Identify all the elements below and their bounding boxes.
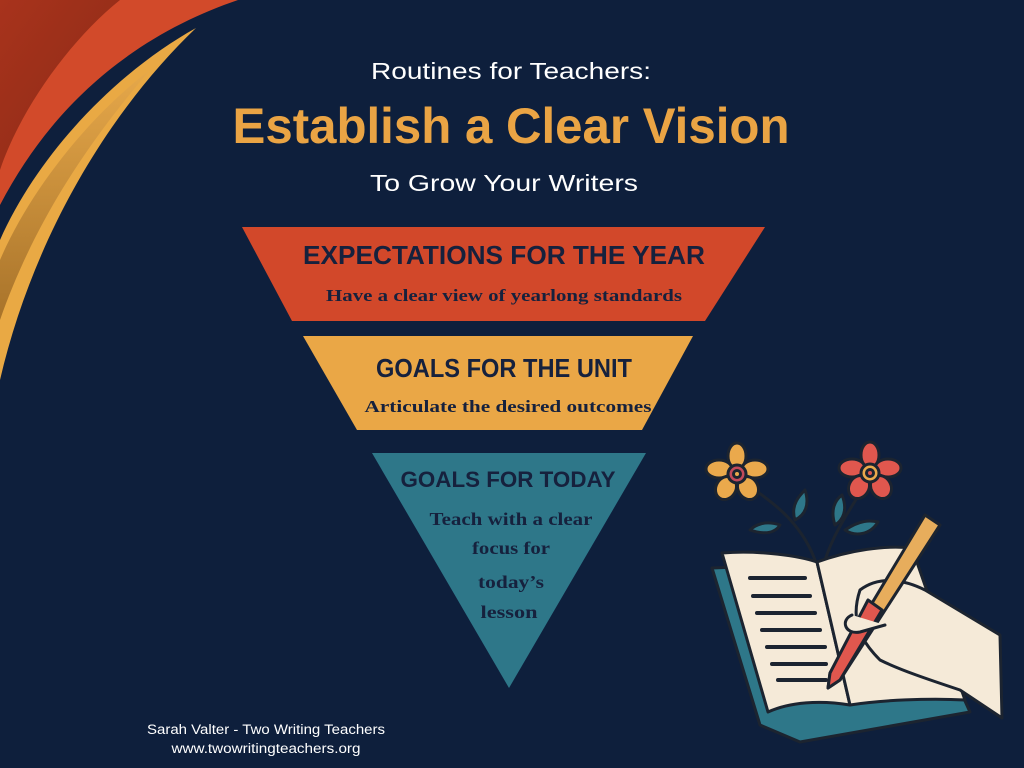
main title: Establish a Clear Vision: [232, 98, 790, 154]
panel: expectations for the year: EXPECTATIONS FOR THE YEAR: [303, 240, 705, 270]
fingers: [845, 615, 885, 632]
right page: [817, 547, 965, 705]
footer credit: Sarah Valter - Two Writing Teachers: [147, 722, 385, 737]
footer credit: www.twowritingteachers.org: [170, 741, 360, 756]
panel: goals for today: [372, 453, 646, 688]
panel: goals for the unit: GOALS FOR THE UNIT: [376, 353, 632, 383]
panel: goals for today: Teach with a clear: [430, 509, 592, 529]
hand: [856, 581, 1002, 718]
footer credit: [147, 722, 385, 756]
panel: goals for today: GOALS FOR TODAY: [400, 467, 616, 492]
illustration: book, hand, pencil, flowers: [706, 442, 1002, 742]
subtitle bottom: To Grow Your Writers: [370, 170, 638, 196]
text lines: [750, 578, 826, 680]
subtitle top: Routines for Teachers:: [371, 58, 651, 84]
panel: goals for the unit: Articulate the desired outcomes: [364, 397, 652, 416]
book cover: [712, 560, 970, 742]
yellow flower: [706, 443, 768, 503]
title block: [232, 58, 790, 196]
panel: expectations for the year: Have a clear view of yearlong standards: [326, 286, 682, 305]
left page: [722, 552, 850, 712]
panel: goals for today: focus for: [472, 538, 550, 558]
panel: expectations for the year: [242, 227, 765, 321]
pencil: [828, 515, 940, 688]
panel: goals for the unit: [303, 336, 693, 430]
decorative swoosh top-left: [0, 0, 238, 380]
panel: goals for today: today’s: [478, 572, 544, 592]
red flower: [839, 442, 901, 502]
stems and leaves: [740, 480, 878, 560]
panel: goals for today: lesson: [480, 602, 538, 622]
